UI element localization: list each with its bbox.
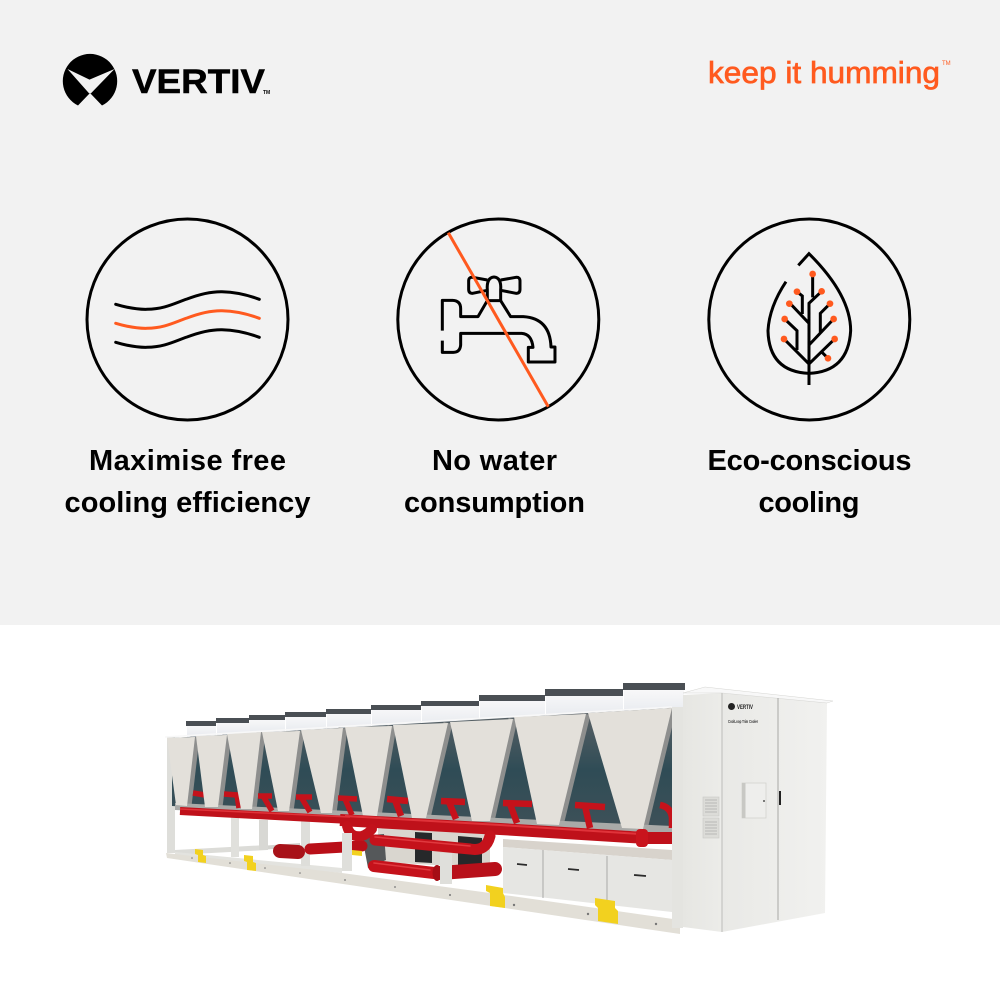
top rail highlight (165, 707, 672, 737)
cabinet logo (728, 703, 753, 711)
coil backdrop (172, 708, 672, 833)
heading: maximise free cooling efficiency: Maximise free (89, 445, 286, 477)
heading: maximise free cooling efficiency (64, 445, 310, 519)
heading: eco-conscious cooling: Eco-conscious (708, 445, 912, 477)
front legs and base beam (166, 833, 680, 934)
cabinet electrical box (742, 783, 766, 818)
icon: circuit leaf in circle (709, 219, 910, 420)
slogan: keep it humming: keep it humming (708, 55, 940, 90)
heading: maximise free cooling efficiency: cooling efficiency (64, 487, 310, 519)
icon: air flow waves in circle (87, 219, 288, 420)
side vents (703, 797, 719, 838)
icon: crossed-out water tap in circle (398, 219, 599, 420)
cabinet logo: VERTIV (737, 705, 753, 711)
rear frame, legs and base (167, 737, 490, 873)
door latch (779, 791, 781, 805)
yellow lifting brackets (195, 849, 618, 924)
wordmark: VERTIV: VERTIV (132, 63, 265, 101)
main red pipe (180, 809, 672, 847)
machinery block (378, 826, 490, 868)
heading: no water consumption: consumption (404, 487, 585, 519)
icon: Vertiv emblem (63, 54, 117, 106)
white V panels (167, 708, 672, 829)
red branch pipes (193, 793, 672, 828)
Vertiv logo (63, 54, 270, 106)
heading: no water consumption: No water (432, 445, 557, 477)
cabinet (672, 687, 833, 932)
lower rail under coils (175, 803, 672, 833)
heading: eco-conscious cooling: cooling (758, 487, 860, 519)
product image: free cooling chiller unit (165, 683, 833, 934)
cabinet product name: CoolLoop Trim Cooler (728, 719, 758, 724)
slogan: keep it humming: TM (942, 61, 951, 67)
lower service compartments (503, 839, 672, 912)
heading: no water consumption (404, 445, 585, 519)
coil side stripes (187, 708, 672, 829)
heading: eco-conscious cooling (708, 445, 912, 519)
rear fans (186, 683, 685, 738)
lower red pipework (280, 826, 495, 881)
trademark: TM (263, 90, 270, 96)
grey upper background panel (0, 0, 1000, 625)
